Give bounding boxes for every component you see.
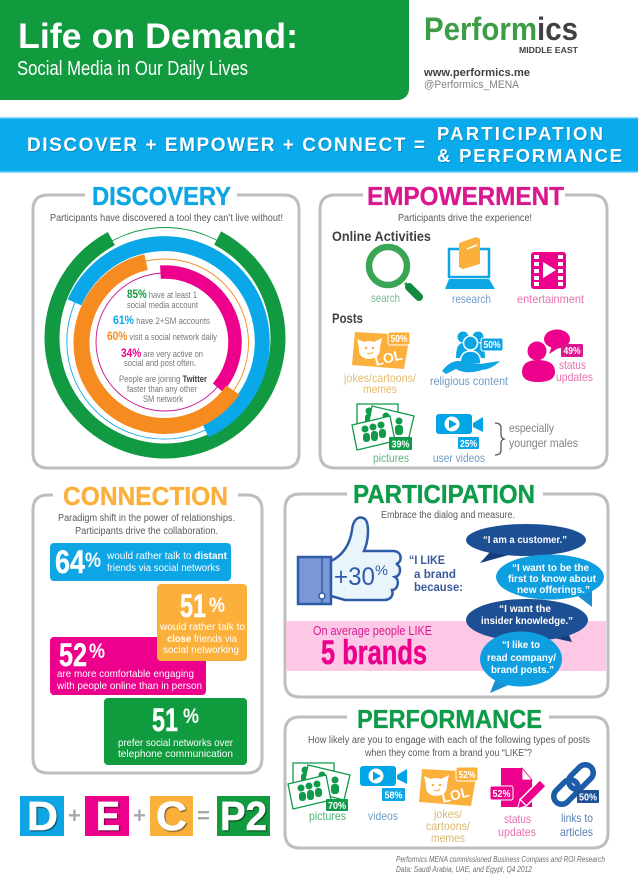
- icon: jokes lol: [419, 767, 478, 806]
- text: I like a brand because: “I LIKE: [409, 555, 445, 567]
- stat: 5 brands: 5 brands: [321, 634, 427, 672]
- text: I like a brand because: [409, 555, 463, 594]
- stats text: social and post often.: [124, 358, 196, 368]
- icon: user videos: [436, 414, 483, 450]
- icon: status updates: 49%: [564, 346, 581, 357]
- icon: religious content: 50%: [484, 340, 501, 351]
- label: status updates: status: [559, 358, 586, 372]
- stats text: 61% have 2+SM accounts: [113, 313, 210, 327]
- label: pictures: pictures: [373, 451, 409, 465]
- logo: Performics: www.performics.me: [423, 67, 530, 79]
- label: entertainment: entertainment: [517, 292, 585, 306]
- note: younger males: younger males: [509, 436, 578, 450]
- subtitle: [58, 513, 235, 537]
- stat card: 64%: [50, 543, 231, 581]
- footnote: [396, 855, 605, 874]
- icon: pictures: [352, 404, 414, 450]
- label: status updates: updates: [556, 370, 593, 384]
- formula: D + E + C = P2: +: [68, 803, 81, 828]
- stat card: 64%: %: [85, 549, 101, 572]
- stat card: 51% telephone: 51: [152, 702, 178, 738]
- icon: videos: [360, 766, 407, 802]
- stat card: 51% close friends: close friends via: [167, 633, 237, 645]
- icon: jokes lol: 50%: [390, 334, 408, 345]
- panel: empowerment: [320, 181, 607, 468]
- icon: entertainment film: [531, 252, 566, 289]
- subtitle: Embrace the dialog and measure.: [381, 510, 515, 521]
- logo: Performics: Performics: [424, 11, 578, 47]
- panel: discovery: [12, 181, 318, 491]
- bubble: company posts: brand posts.”: [491, 665, 554, 676]
- panel: participation: [285, 479, 608, 697]
- section: posts: Posts: [332, 310, 363, 326]
- icon: thumbs up +30%: [298, 518, 401, 604]
- text: I like a brand because: because:: [414, 582, 463, 594]
- heading: participation: PARTICIPATION: [353, 479, 535, 509]
- bubble: insider knowledge: insider knowledge.”: [481, 616, 573, 627]
- stat card: 52%: [50, 637, 206, 695]
- label: links to articles: links to: [561, 811, 593, 825]
- formula: D + E + C = P2: P2: [220, 793, 267, 839]
- stats text: People are joining Twitter: [119, 374, 207, 384]
- equation band: DISCOVER + EMPOWER + CONNECT =: [27, 135, 425, 156]
- label: user videos: user videos: [433, 451, 485, 465]
- icon: thumbs up +30%: %: [375, 562, 388, 578]
- formula: D + E + C = P2: C: [156, 793, 187, 839]
- stat card: 52%: 52: [59, 637, 87, 673]
- bubble: customer: “I am a customer.”: [483, 535, 567, 546]
- stat card: 64%: would rather talk to distant: [106, 550, 227, 562]
- bubble: customer: [466, 524, 586, 563]
- label: jokes: [426, 807, 471, 845]
- label: pictures: pictures: [309, 809, 346, 823]
- stat card: 51% close friends: 51: [180, 588, 206, 624]
- stat card: 51% telephone: [104, 698, 247, 765]
- subtitle: Participants have discovered a tool they can’t live without!: [50, 213, 283, 224]
- bubble: first to know: first to know about: [508, 574, 597, 585]
- icon: thumbs up +30%: +30: [334, 563, 375, 591]
- question: [308, 735, 590, 759]
- label: jokes: cartoons/: [426, 819, 471, 833]
- icon: search: [369, 247, 419, 297]
- icon: links chain: [550, 761, 599, 808]
- stats text: 60% visit a social network daily: [107, 329, 217, 343]
- panel: performance: [285, 704, 608, 848]
- icon: status document and pencil: 52%: [492, 789, 511, 800]
- stat card: 51% close friends: [157, 584, 247, 661]
- formula: D + E + C = P2: D: [27, 793, 58, 839]
- label: jokes: jokes/cartoons/: [343, 371, 417, 385]
- label: links to articles: [560, 811, 593, 839]
- bubble: first to know: new offerings.”: [517, 585, 590, 596]
- icon: research: [445, 237, 495, 289]
- pink strip: [286, 621, 606, 671]
- bubble: company posts: “I like to: [502, 640, 540, 651]
- ring chart: [12, 185, 318, 491]
- label: jokes: memes: [363, 382, 397, 396]
- stat card: 52%: %: [89, 640, 105, 663]
- title: Life on Demand:: [18, 16, 298, 56]
- stat card: 51% telephone: prefer social networks over: [118, 737, 233, 749]
- stat card: 52%: are more comfortable engaging: [57, 668, 194, 680]
- stat card: 51% close friends: %: [209, 594, 225, 617]
- text: I like a brand because: a brand: [414, 569, 456, 581]
- formula: D + E + C = P2: =: [197, 803, 210, 828]
- question: when they come from a brand you “LIKE”?: [364, 748, 532, 759]
- stat card: 51% telephone: telephone communication: [118, 748, 233, 760]
- label: jokes: memes: [431, 831, 465, 845]
- stat card: 64%: friends via social networks: [107, 562, 220, 574]
- label: videos: videos: [368, 809, 398, 823]
- panel: connection: [33, 481, 262, 773]
- note: younger males: [509, 421, 578, 450]
- icon: pictures: 70%: [328, 801, 346, 812]
- note: younger males: especially: [509, 421, 554, 435]
- stats text: faster than any other: [127, 384, 197, 394]
- bubble: insider knowledge: “I want the: [499, 604, 551, 615]
- bubble: company posts: read company/: [487, 653, 556, 664]
- logo: Performics: MIDDLE EAST: [519, 45, 579, 55]
- bubble: first to know: [496, 554, 604, 607]
- text: average likes: On average people LIKE: [313, 623, 432, 638]
- icon: links chain: 50%: [579, 792, 597, 804]
- logo: Performics: @Performics_MENA: [424, 79, 520, 91]
- stats text: 34% are very active on: [121, 346, 203, 360]
- stats text: 85% have at least 1: [127, 287, 197, 301]
- equation band: & PERFORMANCE: [437, 145, 622, 166]
- stat card: 51% close friends: social networking: [163, 644, 239, 656]
- label: jokes: [343, 371, 417, 396]
- formula: D + E + C = P2: +: [133, 803, 146, 828]
- stat card: 52%: with people online than in person: [56, 680, 202, 692]
- icon: religious content: [442, 332, 503, 374]
- label: status updates: [556, 358, 593, 384]
- heading: discovery: DISCOVERY: [92, 181, 231, 211]
- equation band: PARTICIPATION: [437, 123, 603, 144]
- brace: [495, 423, 504, 455]
- bubble: first to know: “I want to be the: [512, 563, 589, 574]
- stats text: [107, 287, 217, 404]
- section: online activities: Online Activities: [332, 228, 431, 244]
- header banner: [0, 0, 409, 100]
- stats text: social media account: [127, 300, 198, 310]
- subtitle: Participants drive the collaboration.: [75, 526, 218, 537]
- formula: D + E + C = P2: E: [96, 793, 120, 839]
- footnote: Data: Saudi Arabia, UAE, and Egypt, Q4 2012: [396, 865, 532, 874]
- subtitle: Social Media in Our Daily Lives: [17, 58, 248, 80]
- formula: D + E + C = P2: [20, 793, 270, 839]
- heading: performance: PERFORMANCE: [357, 704, 542, 734]
- label: search: search: [371, 291, 400, 305]
- icon: user videos: 25%: [460, 439, 477, 450]
- question: How likely are you to engage with each of the following types of posts: [308, 735, 590, 746]
- label: status updates: updates: [498, 825, 536, 839]
- icon: jokes lol: 52%: [458, 770, 476, 781]
- bubble: insider knowledge: [466, 599, 588, 642]
- subtitle: Paradigm shift in the power of relationships.: [58, 513, 235, 524]
- subtitle: Participants drive the experience!: [398, 213, 532, 224]
- icon: jokes lol: [352, 332, 410, 369]
- label: links to articles: articles: [560, 825, 593, 839]
- label: religious content: religious content: [430, 374, 509, 388]
- heading: empowerment: EMPOWERMENT: [367, 181, 564, 211]
- stat card: 51% telephone: %: [183, 705, 199, 728]
- label: status updates: status: [504, 812, 531, 826]
- icon: videos: 58%: [384, 790, 403, 802]
- label: jokes: jokes/: [433, 807, 463, 821]
- icon: pictures: 39%: [392, 440, 410, 450]
- label: research: research: [452, 292, 491, 306]
- icon: status document and pencil: [490, 768, 546, 812]
- logo: Performics: [423, 11, 579, 91]
- icon: pictures: [288, 763, 350, 812]
- stats text: SM network: [143, 394, 183, 404]
- label: status updates: [498, 812, 536, 839]
- stat card: 51% close friends: would rather talk to: [159, 621, 245, 633]
- icon: status updates: [522, 330, 583, 382]
- equation band: [0, 117, 638, 173]
- stat card: 64%: 64: [55, 544, 85, 580]
- heading: connection: CONNECTION: [63, 481, 228, 511]
- bubble: company posts: [480, 632, 562, 693]
